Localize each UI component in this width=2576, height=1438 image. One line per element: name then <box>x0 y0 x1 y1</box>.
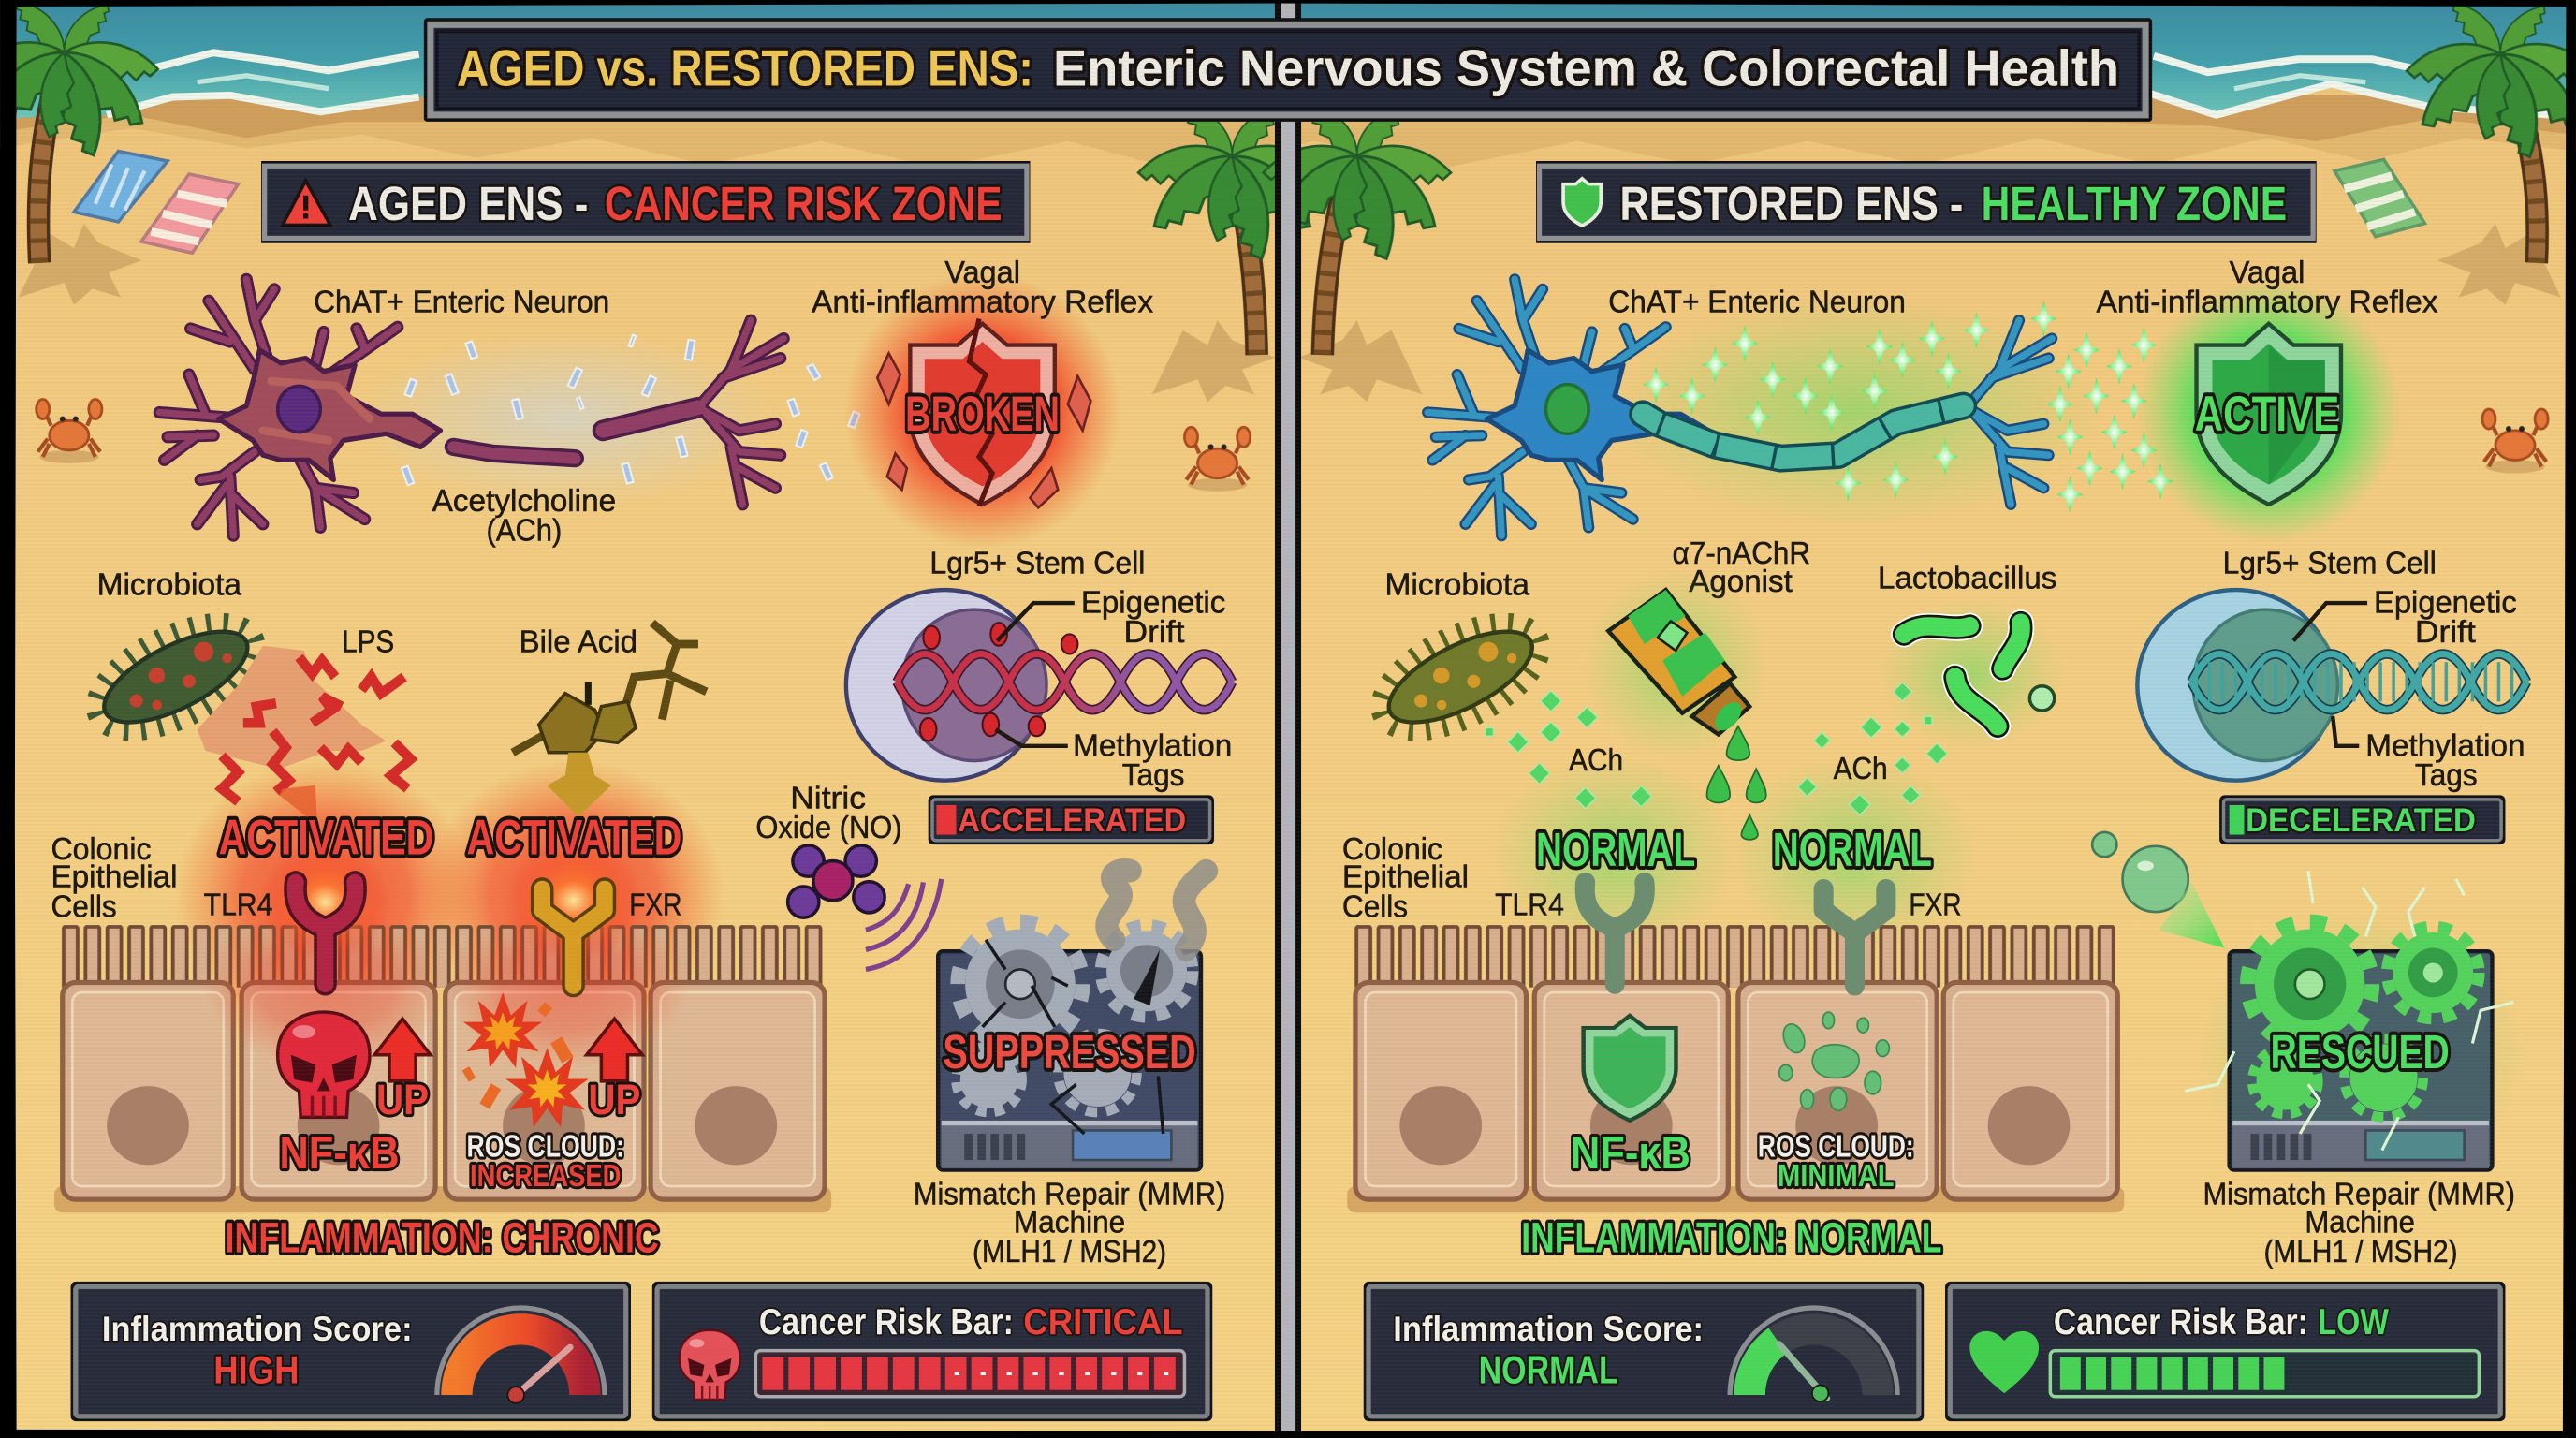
heading text: healthy zone: HEALTHY ZONE <box>1982 177 2287 230</box>
LPS cloud with squiggles <box>198 646 411 825</box>
label: epigenetic drift: Epigenetic <box>1081 586 1225 621</box>
icon: ROS explosions <box>462 992 589 1127</box>
text: inflammation score: Inflammation Score: <box>102 1310 413 1348</box>
label: Microbiota right: Microbiota <box>1385 567 1530 602</box>
lightning <box>2185 871 2513 1151</box>
icon: bile acid molecule <box>513 623 707 816</box>
icon: potion drops <box>1707 726 1766 840</box>
icon: warning triangle <box>283 181 330 225</box>
label: MMR machine aged: (MLH1 / MSH2) <box>973 1235 1166 1269</box>
label: colonic cells right <box>1342 832 1469 924</box>
label: epigenetic drift <box>1081 586 1225 650</box>
colonic epithelium: restored <box>1347 925 2124 1212</box>
icon: minimal ROS cloud <box>1779 1012 1889 1110</box>
status bar: decelerated <box>2219 795 2505 844</box>
icon: microbiota bacterium aged <box>81 603 270 751</box>
label: epigenetic drift right: Epigenetic <box>2374 586 2517 621</box>
label: MMR machine aged <box>914 1177 1225 1269</box>
label: colonic epithelial cells: Cells <box>51 889 117 924</box>
status: rescued: RESCUED <box>2271 1025 2450 1078</box>
icon: NF-kB shield green <box>1584 1016 1676 1121</box>
label: epigenetic drift: Drift <box>1123 615 1185 650</box>
heading text: aged: AGED ENS - <box>348 177 588 230</box>
label: colonic cells right: Colonic <box>1342 832 1442 867</box>
label: Bile Acid: Bile Acid <box>520 625 637 660</box>
label: methylation tags: Methylation <box>1073 728 1232 763</box>
icon: red skull NF-kB <box>278 1012 370 1117</box>
label: colonic epithelial cells <box>51 832 178 924</box>
panel: cancer risk bar critical <box>652 1282 1212 1421</box>
label: Vagal: Vagal <box>944 256 1020 290</box>
status: suppressed: SUPPRESSED <box>943 1025 1196 1078</box>
ACh particles: sparse <box>402 335 859 485</box>
label: ACh right: ACh <box>1834 752 1888 786</box>
icon: lactobacillus cluster <box>1880 598 2063 749</box>
status bar: accelerated <box>929 795 1214 844</box>
label: LPS: LPS <box>342 625 394 660</box>
status label: active: ACTIVE <box>2195 387 2339 442</box>
label: methylation tags <box>1073 728 1232 793</box>
label: methylation tags right: Tags <box>2415 758 2478 793</box>
icon: stem cell aged <box>846 590 1232 781</box>
icon: small skull <box>680 1330 740 1400</box>
icon: FXR receptor normal <box>1823 888 1886 986</box>
label: TLR4: TLR4 <box>204 888 272 923</box>
panel heading: restored ENS <box>1536 161 2317 243</box>
text: inflammation normal: INFLAMMATION: NORMAL <box>1521 1213 1942 1261</box>
text: ROS cloud: ROS CLOUD: <box>466 1130 624 1165</box>
panel heading: aged ENS <box>261 161 1030 243</box>
label: a7-nAChR agonist <box>1673 536 1810 599</box>
palm shadows <box>19 224 2561 402</box>
label: nitric oxide <box>755 781 902 845</box>
panel: inflammation score restored <box>1364 1282 1924 1421</box>
heading text: restored: RESTORED ENS - <box>1620 177 1963 230</box>
arrow: bile acid to FXR <box>547 753 611 816</box>
text: UP: UP <box>376 1076 429 1123</box>
label: ACh: (ACh) <box>487 513 562 548</box>
status: normal TLR4: NORMAL <box>1536 823 1695 876</box>
label: nitric oxide: Oxide (NO) <box>755 811 902 845</box>
label: colonic cells right: Cells <box>1342 889 1408 924</box>
label: methylation tags: Tags <box>1122 758 1184 793</box>
panel: cancer risk bar low <box>1945 1282 2505 1421</box>
status: activated FXR: ACTIVATED <box>466 811 681 866</box>
label: epigenetic drift right <box>2374 586 2517 650</box>
tissue glow left <box>174 761 724 1030</box>
label: MMR machine restored <box>2203 1177 2515 1269</box>
icon: MMR machine rescued <box>2185 871 2525 1191</box>
label: epigenetic drift right: Drift <box>2415 615 2477 650</box>
label: TLR4 right: TLR4 <box>1495 888 1564 923</box>
text: cancer risk bar right: Cancer Risk Bar: <box>2054 1302 2308 1343</box>
gauge: normal <box>1730 1308 1897 1401</box>
neuron: healthy ChAT+ enteric neuron <box>1427 279 2102 536</box>
title banner <box>424 18 2152 122</box>
text: critical: CRITICAL <box>1023 1302 1183 1343</box>
label: a7-nAChR agonist: α7-nAChR <box>1673 536 1810 571</box>
palm tree: centre right <box>1260 96 1454 355</box>
icon: MMR machine damaged <box>938 870 1207 1170</box>
label: Lgr5 stem cell right: Lgr5+ Stem Cell <box>2223 547 2437 581</box>
label: ChAT+ neuron right: ChAT+ Enteric Neuron <box>1608 285 1906 319</box>
crabs <box>37 399 2548 492</box>
label: methylation tags right: Methylation <box>2365 728 2525 763</box>
status label: broken: BROKEN <box>905 387 1060 442</box>
text: HIGH: HIGH <box>213 1348 299 1392</box>
label: MMR machine restored: Machine <box>2305 1205 2415 1240</box>
title text: yellow: AGED vs. RESTORED ENS: <box>457 39 1033 96</box>
label: methylation tags right <box>2365 728 2525 793</box>
label: ChAT+ neuron: ChAT+ Enteric Neuron <box>314 285 609 319</box>
icon: TLR4 receptor normal <box>1585 882 1645 984</box>
title text: white: Enteric Nervous System & Colorectal Health <box>1053 39 2119 96</box>
palm tree: centre left <box>1135 96 1329 355</box>
text: NF-kB green: NF-κB <box>1571 1128 1690 1179</box>
tissue red tint <box>202 903 690 1068</box>
text: inflammation chronic: INFLAMMATION: CHRONIC <box>225 1213 659 1261</box>
label: colonic epithelial cells: Epithelial <box>51 860 178 895</box>
icon: up arrow NF-kB <box>374 1019 431 1081</box>
neuron: damaged ChAT+ enteric neuron <box>159 279 783 536</box>
icon: green heart <box>1969 1331 2039 1393</box>
bar: critical level <box>755 1351 1184 1397</box>
label: a7-nAChR agonist: Agonist <box>1689 565 1793 599</box>
label: anti-inflammatory reflex: Anti-inflammatory Reflex <box>812 285 1153 319</box>
label: Lgr5 stem cell: Lgr5+ Stem Cell <box>929 547 1145 581</box>
colonic epithelium: aged <box>54 925 831 1212</box>
label: acetylcholine: Acetylcholine <box>432 484 616 519</box>
text: NF-kB red: NF-κB <box>279 1128 400 1179</box>
text: increased: INCREASED <box>470 1159 621 1194</box>
tissue glow right <box>1492 756 1976 953</box>
heading text: cancer risk zone: CANCER RISK ZONE <box>605 177 1003 230</box>
smoke <box>1107 870 1207 949</box>
arrow: bubble to MMR machine <box>2159 882 2224 948</box>
icon: microbiota bacterium restored <box>1367 603 1555 751</box>
icon: FXR receptor activated <box>505 838 642 986</box>
text: accelerated: ACCELERATED <box>958 802 1186 839</box>
centre divider <box>1275 0 1301 1438</box>
label: MMR machine restored: (MLH1 / MSH2) <box>2263 1235 2458 1269</box>
text: NORMAL score: NORMAL <box>1479 1348 1618 1392</box>
icon: broken shield <box>844 272 1120 549</box>
palm tree: top left <box>0 0 161 263</box>
gauge: high <box>437 1308 605 1403</box>
label: colonic epithelial cells: Colonic <box>51 832 152 867</box>
ACh particles: pathways <box>1486 682 1947 815</box>
label: Microbiota: Microbiota <box>97 567 242 602</box>
icon: nitric oxide molecule <box>788 845 942 969</box>
text: inflammation score right: Inflammation Score: <box>1393 1310 1704 1348</box>
label: ACh left: ACh <box>1569 743 1623 778</box>
text: minimal: MINIMAL <box>1778 1159 1895 1194</box>
icon: potion bottle <box>1584 570 1767 761</box>
status: normal FXR: NORMAL <box>1773 823 1932 876</box>
ACh particles: abundant green sparkles <box>1643 301 2174 513</box>
label: reflex right: Anti-inflammatory Reflex <box>2096 285 2438 319</box>
text: UP ROS: UP <box>588 1076 641 1123</box>
labels: neuron row left <box>314 256 1153 548</box>
bar: low level <box>2050 1351 2479 1397</box>
text: decelerated: DECELERATED <box>2246 802 2476 839</box>
label: MMR machine aged: Machine <box>1014 1205 1125 1240</box>
label: MMR machine restored: Mismatch Repair (MMR) <box>2203 1177 2515 1211</box>
icon: TLR4 receptor activated <box>259 843 391 984</box>
icon: bubbles <box>2092 832 2188 912</box>
text: ROS cloud right: ROS CLOUD: <box>1758 1130 1914 1165</box>
panel: inflammation score aged <box>71 1282 631 1421</box>
icon: green shield <box>1563 179 1601 226</box>
text: cancer risk bar: Cancer Risk Bar: <box>759 1302 1014 1343</box>
icon: up arrow ROS <box>587 1019 642 1081</box>
labels: neuron row right <box>1608 256 2438 319</box>
label: FXR: FXR <box>629 888 681 923</box>
label: Lactobacillus: Lactobacillus <box>1878 561 2056 595</box>
palm tree: top right <box>2404 0 2576 263</box>
label: nitric oxide: Nitric <box>790 781 866 815</box>
icon: active shield <box>2137 279 2400 542</box>
label: MMR machine aged: Mismatch Repair (MMR) <box>914 1177 1225 1211</box>
label: colonic cells right: Epithelial <box>1342 860 1469 895</box>
status: activated TLR4: ACTIVATED <box>218 811 433 866</box>
label: Vagal right: Vagal <box>2230 256 2305 290</box>
towels <box>74 151 2424 253</box>
label: FXR right: FXR <box>1909 888 1962 923</box>
text: low: LOW <box>2318 1302 2389 1343</box>
icon: stem cell restored <box>2137 590 2526 781</box>
